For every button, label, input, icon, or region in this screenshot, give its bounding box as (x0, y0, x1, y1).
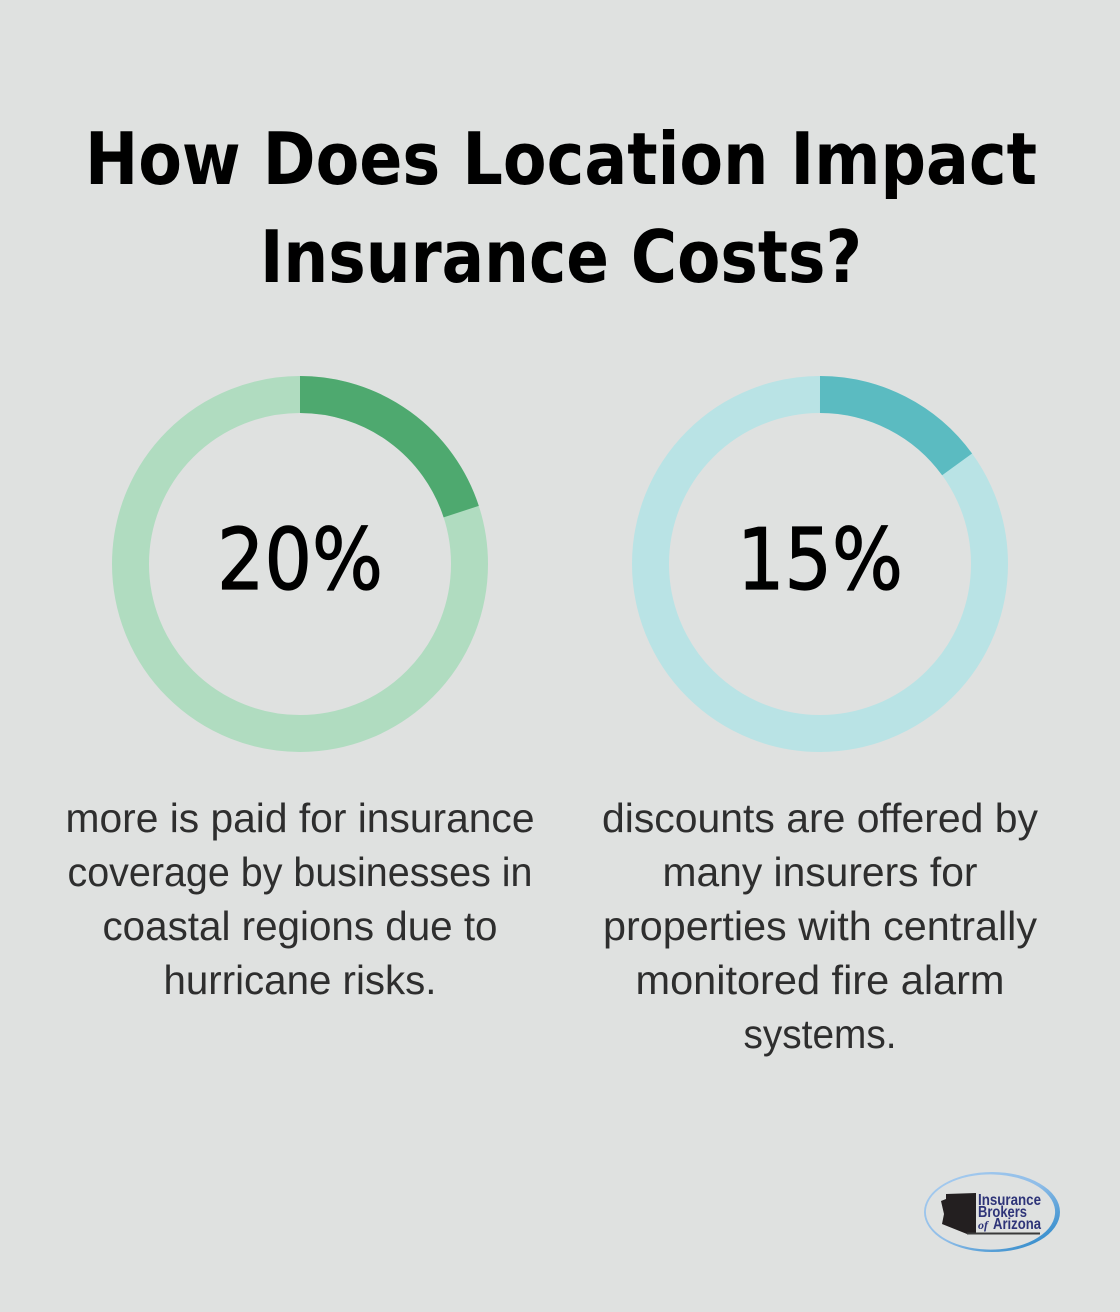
text block: fire alarm discounts: many insurers for (662, 849, 978, 895)
donut chart: 15%: 15% (737, 511, 903, 610)
logo wordmark: of (978, 1218, 989, 1232)
text block: coastal regions (66, 795, 534, 1003)
text block: fire alarm discounts: systems. (744, 1011, 896, 1057)
icon: Arizona state silhouette (941, 1193, 976, 1234)
text block: fire alarm discounts (602, 795, 1038, 1057)
panel: 20% coastal regions (66, 394, 534, 1003)
logo ring (924, 1172, 1060, 1252)
donut chart: 20%: 20% (217, 511, 383, 610)
text block: fire alarm discounts: properties with centrally (603, 903, 1037, 949)
text block: coastal regions: coastal regions due to (102, 903, 498, 949)
text block: coastal regions: hurricane risks. (164, 957, 436, 1003)
donut chart: 20% (130, 394, 470, 734)
logo wordmark: Brokers (978, 1204, 1027, 1221)
text block: coastal regions: more is paid for insurance (66, 795, 534, 841)
donut chart: 15% (650, 394, 990, 734)
title (85, 117, 1037, 299)
text block: coastal regions: coverage by businesses in (68, 849, 532, 895)
title: Insurance Costs? (260, 215, 862, 299)
text block: fire alarm discounts: monitored fire alarm (636, 957, 1004, 1003)
panel: 15% fire alarm discounts (602, 394, 1038, 1057)
logo wordmark (978, 1192, 1041, 1233)
logo: Insurance Brokers of Arizona (924, 1172, 1060, 1252)
text block: fire alarm discounts: discounts are offered by (602, 795, 1038, 841)
logo wordmark: Insurance (978, 1192, 1041, 1209)
logo wordmark: Arizona (993, 1216, 1041, 1233)
